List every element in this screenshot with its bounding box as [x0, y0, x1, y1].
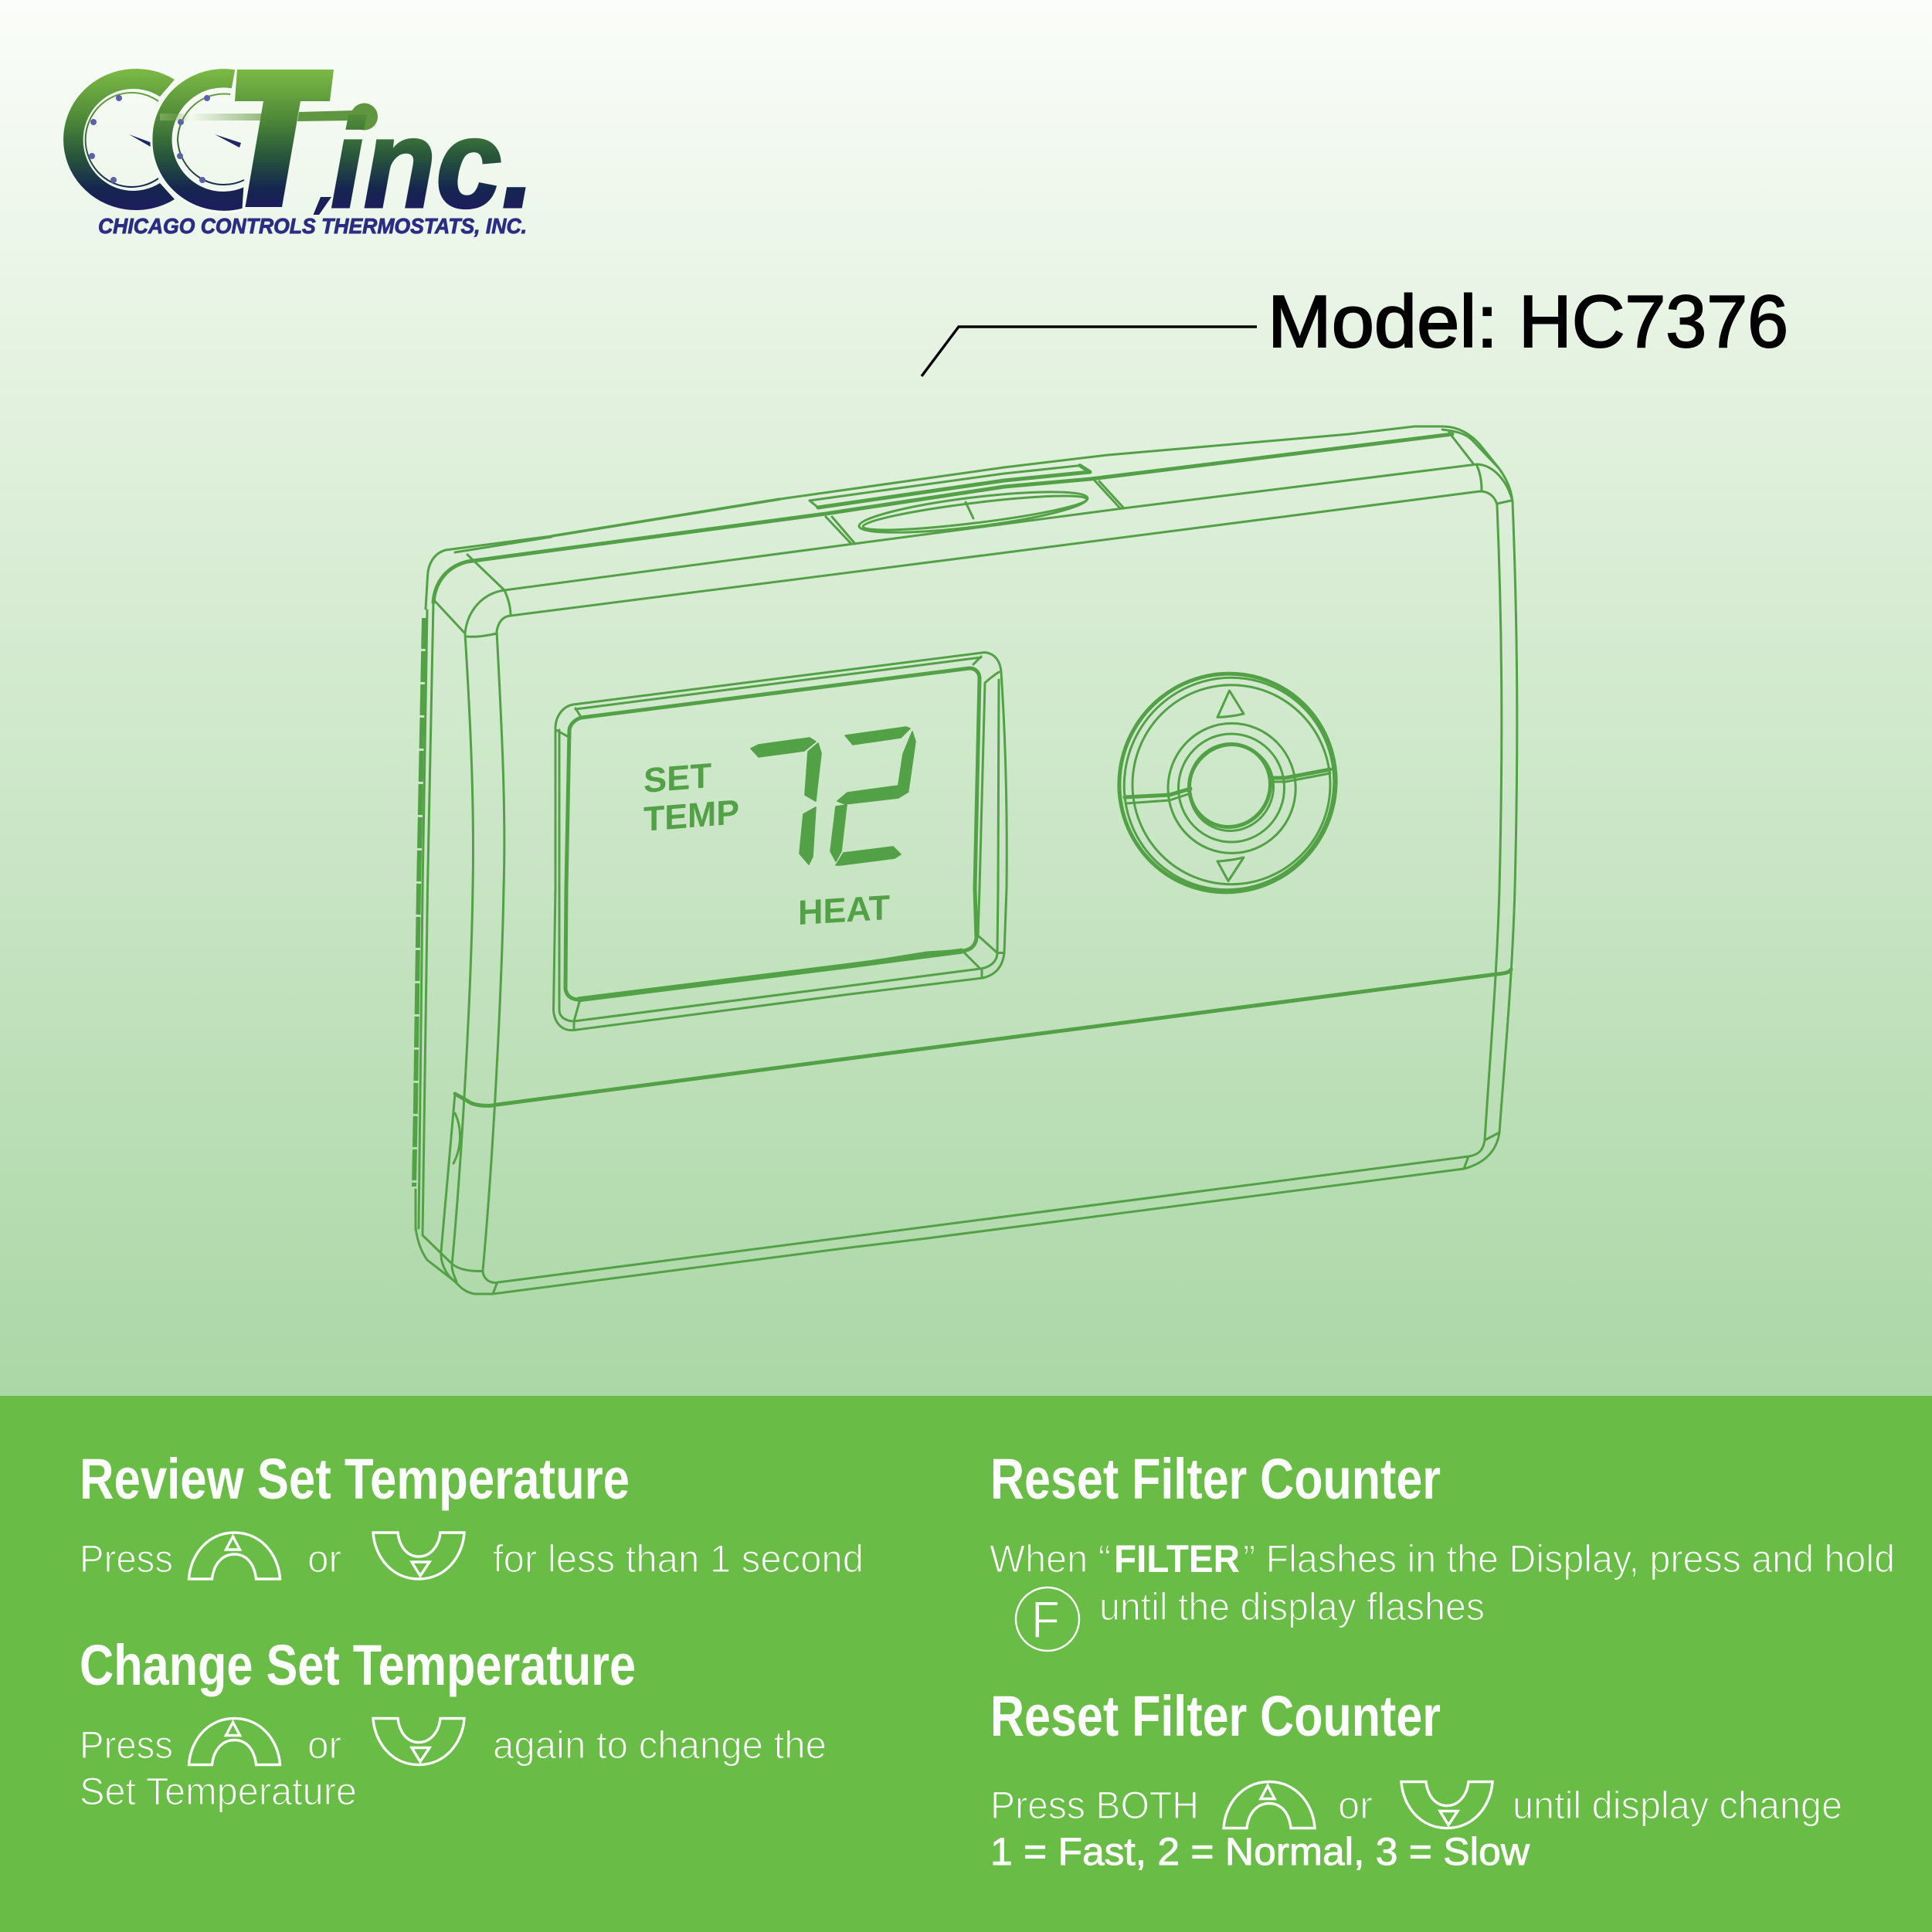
display label TEMP: TEMP — [643, 792, 739, 839]
thermostat body outline — [414, 426, 1517, 1294]
instruction line: until display change — [1513, 1784, 1842, 1827]
instruction line — [80, 1533, 864, 1581]
section: change set temperature — [80, 1633, 827, 1813]
heading: Review Set Temperature — [80, 1447, 630, 1511]
icon: up button — [188, 1533, 280, 1579]
instruction line: Press — [80, 1537, 173, 1581]
instruction panel — [0, 1396, 1932, 1932]
digits 72 — [751, 727, 915, 865]
icon: down button — [1401, 1781, 1492, 1828]
display label SET: SET — [643, 755, 711, 800]
display bezel — [553, 652, 1007, 1031]
logo second letter C with gauge — [151, 68, 245, 212]
model label: Model: — [1268, 280, 1498, 363]
instruction lines: again to change the — [493, 1723, 827, 1767]
icon: F button: F — [1031, 1591, 1060, 1649]
model label — [1268, 280, 1788, 363]
background gradient — [0, 0, 1932, 1396]
logo: CCT, inc. — [63, 68, 535, 238]
instruction line one: When “ — [990, 1537, 1111, 1581]
model label: HC7376 — [1519, 280, 1788, 363]
callout line to model — [922, 327, 1257, 376]
instruction lines: or — [307, 1723, 341, 1767]
logo text inc.: inc. — [331, 93, 535, 234]
section: reset filter counter (display) — [990, 1447, 1895, 1651]
instruction line: or — [307, 1537, 341, 1581]
icon: up button — [188, 1718, 280, 1764]
display label HEAT: HEAT — [798, 888, 890, 932]
logo rod fading behind T — [160, 114, 262, 121]
logo comma — [314, 197, 331, 215]
instruction line two: until the display flashes — [1099, 1585, 1485, 1628]
instruction line one: ” Flashes in the Display, press and hold — [1243, 1537, 1895, 1581]
round control dial — [1079, 634, 1376, 932]
section: review set temperature — [80, 1447, 864, 1581]
heading: Reset Filter Counter — [990, 1447, 1441, 1511]
icon: up button — [1224, 1781, 1315, 1828]
instruction lines: Set Temperature — [80, 1770, 357, 1813]
up arrow — [1217, 691, 1244, 717]
thermostat lower band line — [455, 969, 1511, 1105]
heading: Change Set Temperature — [80, 1633, 636, 1697]
thermostat side door — [441, 1094, 460, 1282]
instruction line: Press BOTH — [990, 1784, 1199, 1827]
icon: down button — [373, 1718, 464, 1764]
speed legend: 1 = Fast, 2 = Normal, 3 = Slow — [990, 1830, 1530, 1873]
instruction lines — [80, 1718, 827, 1813]
instruction line: or — [1338, 1784, 1373, 1827]
instruction line: for less than 1 second — [493, 1537, 864, 1581]
logo letter C with gauge — [63, 69, 175, 210]
heading: Reset Filter Counter — [990, 1684, 1441, 1748]
logo letter T with pointer — [235, 70, 378, 207]
icon: F button — [1016, 1587, 1079, 1651]
instruction line — [990, 1781, 1842, 1828]
top slot and oval button — [810, 466, 1124, 544]
instruction lines: Press — [80, 1723, 173, 1767]
instruction line one: FILTER — [1114, 1537, 1240, 1581]
icon: down button — [373, 1533, 464, 1579]
thermostat line drawing — [414, 426, 1517, 1294]
down arrow — [1217, 857, 1244, 881]
logo tagline: CHICAGO CONTROLS THERMOSTATS, INC. — [98, 214, 527, 238]
section: reset filter counter (speed) — [990, 1684, 1842, 1873]
